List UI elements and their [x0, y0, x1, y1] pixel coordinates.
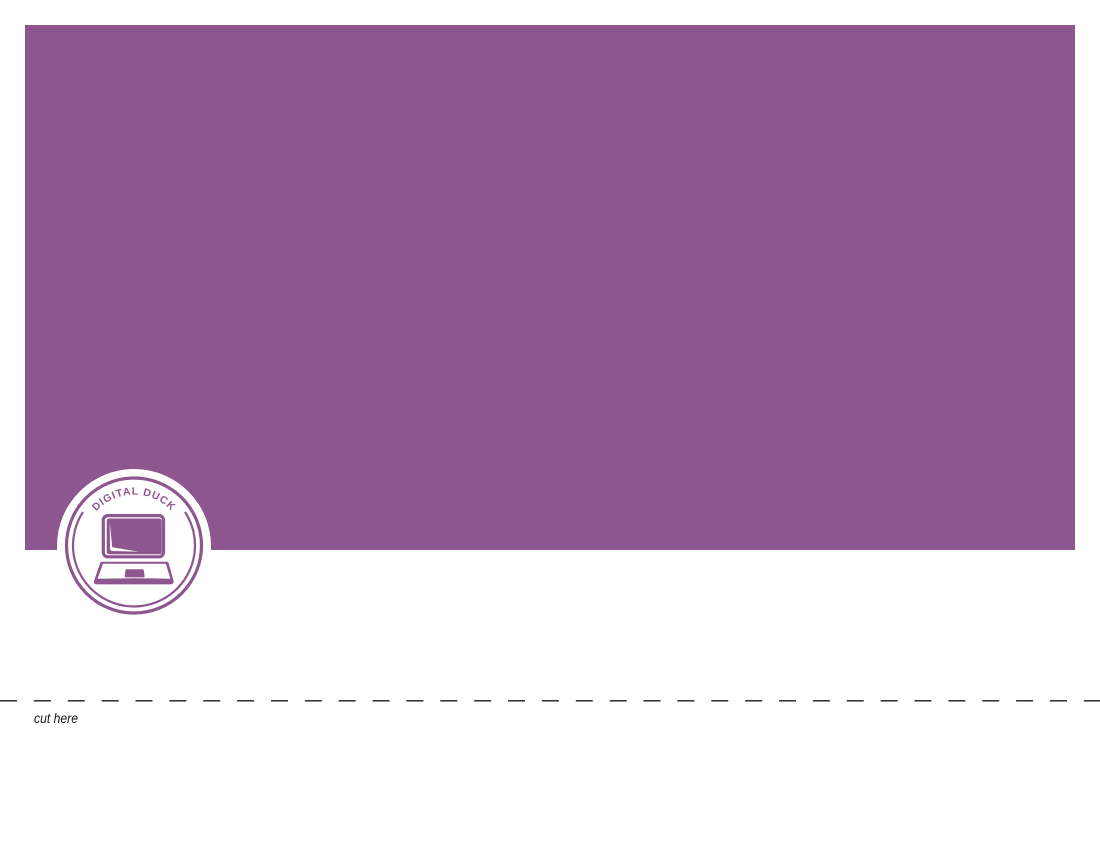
badge text: DIGITAL DUCK [92, 487, 176, 511]
laptop screen frame [103, 516, 164, 557]
laptop screen [107, 518, 162, 554]
panel: purple banner [25, 25, 1075, 550]
laptop base [94, 562, 174, 584]
badge: Digital Duck logo [57, 469, 211, 615]
cut here label: cut here [34, 711, 78, 726]
badge outer ring [66, 478, 202, 613]
laptop trackpad [125, 569, 145, 577]
icon: laptop [94, 516, 174, 584]
laptop base white face [98, 564, 170, 579]
laptop screen glare [110, 522, 138, 552]
badge inner ring [73, 512, 195, 606]
dashed cut line [0, 700, 1100, 702]
badge white backing [57, 469, 211, 550]
